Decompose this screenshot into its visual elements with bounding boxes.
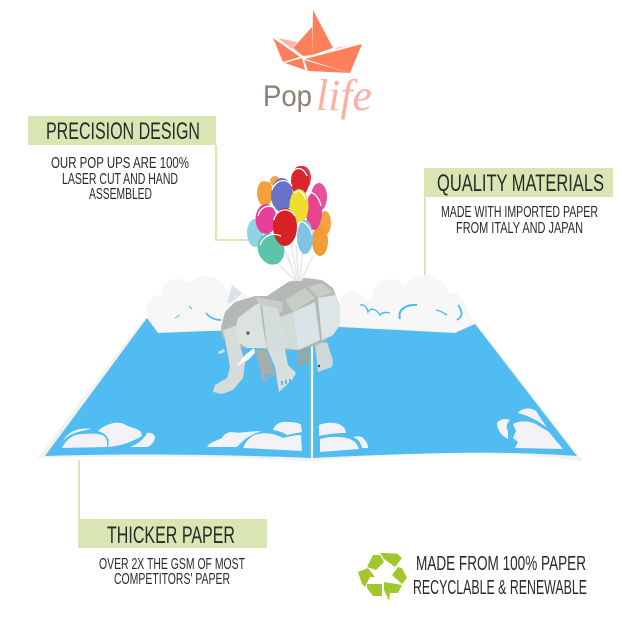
callout: precision design bbox=[28, 116, 216, 203]
clouds: bottom right bbox=[319, 409, 563, 452]
trunk bbox=[213, 325, 245, 394]
balloon strings bbox=[276, 240, 313, 281]
ear bbox=[262, 305, 288, 353]
heading: PRECISION DESIGN bbox=[46, 118, 200, 145]
heading bar bbox=[424, 168, 613, 197]
icon: recycle symbol bbox=[358, 553, 407, 601]
body text bbox=[51, 155, 189, 203]
heading bar bbox=[78, 519, 267, 548]
head bbox=[235, 303, 267, 348]
body text: COMPETITORS' PAPER bbox=[114, 571, 230, 588]
eye bbox=[246, 331, 250, 335]
inner slots bbox=[255, 283, 333, 313]
side panels bbox=[280, 312, 298, 350]
near hind leg bbox=[315, 342, 333, 372]
tusk bbox=[236, 348, 255, 367]
clouds: bottom left bbox=[62, 422, 302, 451]
balloon highlights bbox=[258, 168, 321, 245]
heading: THICKER PAPER bbox=[107, 522, 235, 549]
callout: thicker paper bbox=[78, 519, 267, 588]
far inner leg bbox=[298, 347, 310, 366]
card white border bbox=[38, 317, 583, 461]
background cloud cutouts bbox=[147, 275, 475, 332]
body text: OUR POP UPS ARE 100% bbox=[51, 155, 189, 172]
front leg bbox=[267, 348, 296, 392]
icon: origami boat bbox=[273, 10, 362, 73]
elephant bbox=[213, 278, 340, 394]
far ear bbox=[227, 285, 242, 303]
heading bar bbox=[28, 116, 216, 145]
body text: OVER 2X THE GSM OF MOST bbox=[99, 556, 245, 573]
body text: ASSEMBLED bbox=[89, 186, 152, 203]
body shell bbox=[221, 278, 340, 350]
toe cutouts bbox=[264, 355, 306, 385]
far tusk bbox=[218, 349, 225, 354]
connector lines bbox=[79, 145, 425, 519]
panel: left blue page bbox=[45, 318, 311, 458]
body text bbox=[99, 556, 245, 588]
body text bbox=[441, 204, 598, 237]
pop-up card base bbox=[38, 317, 583, 461]
text: recyclable note bbox=[413, 553, 587, 599]
rear leg bbox=[255, 350, 275, 382]
panel: right blue page bbox=[313, 324, 577, 458]
centre fold bbox=[311, 345, 313, 460]
logo: Poplife bbox=[263, 10, 372, 120]
wordmark: Pop: Pop bbox=[263, 80, 312, 113]
wordmark: life: life bbox=[316, 71, 372, 120]
balloons bbox=[247, 166, 331, 268]
callout: quality materials bbox=[424, 168, 613, 237]
body text: LASER CUT AND HAND bbox=[62, 171, 178, 188]
